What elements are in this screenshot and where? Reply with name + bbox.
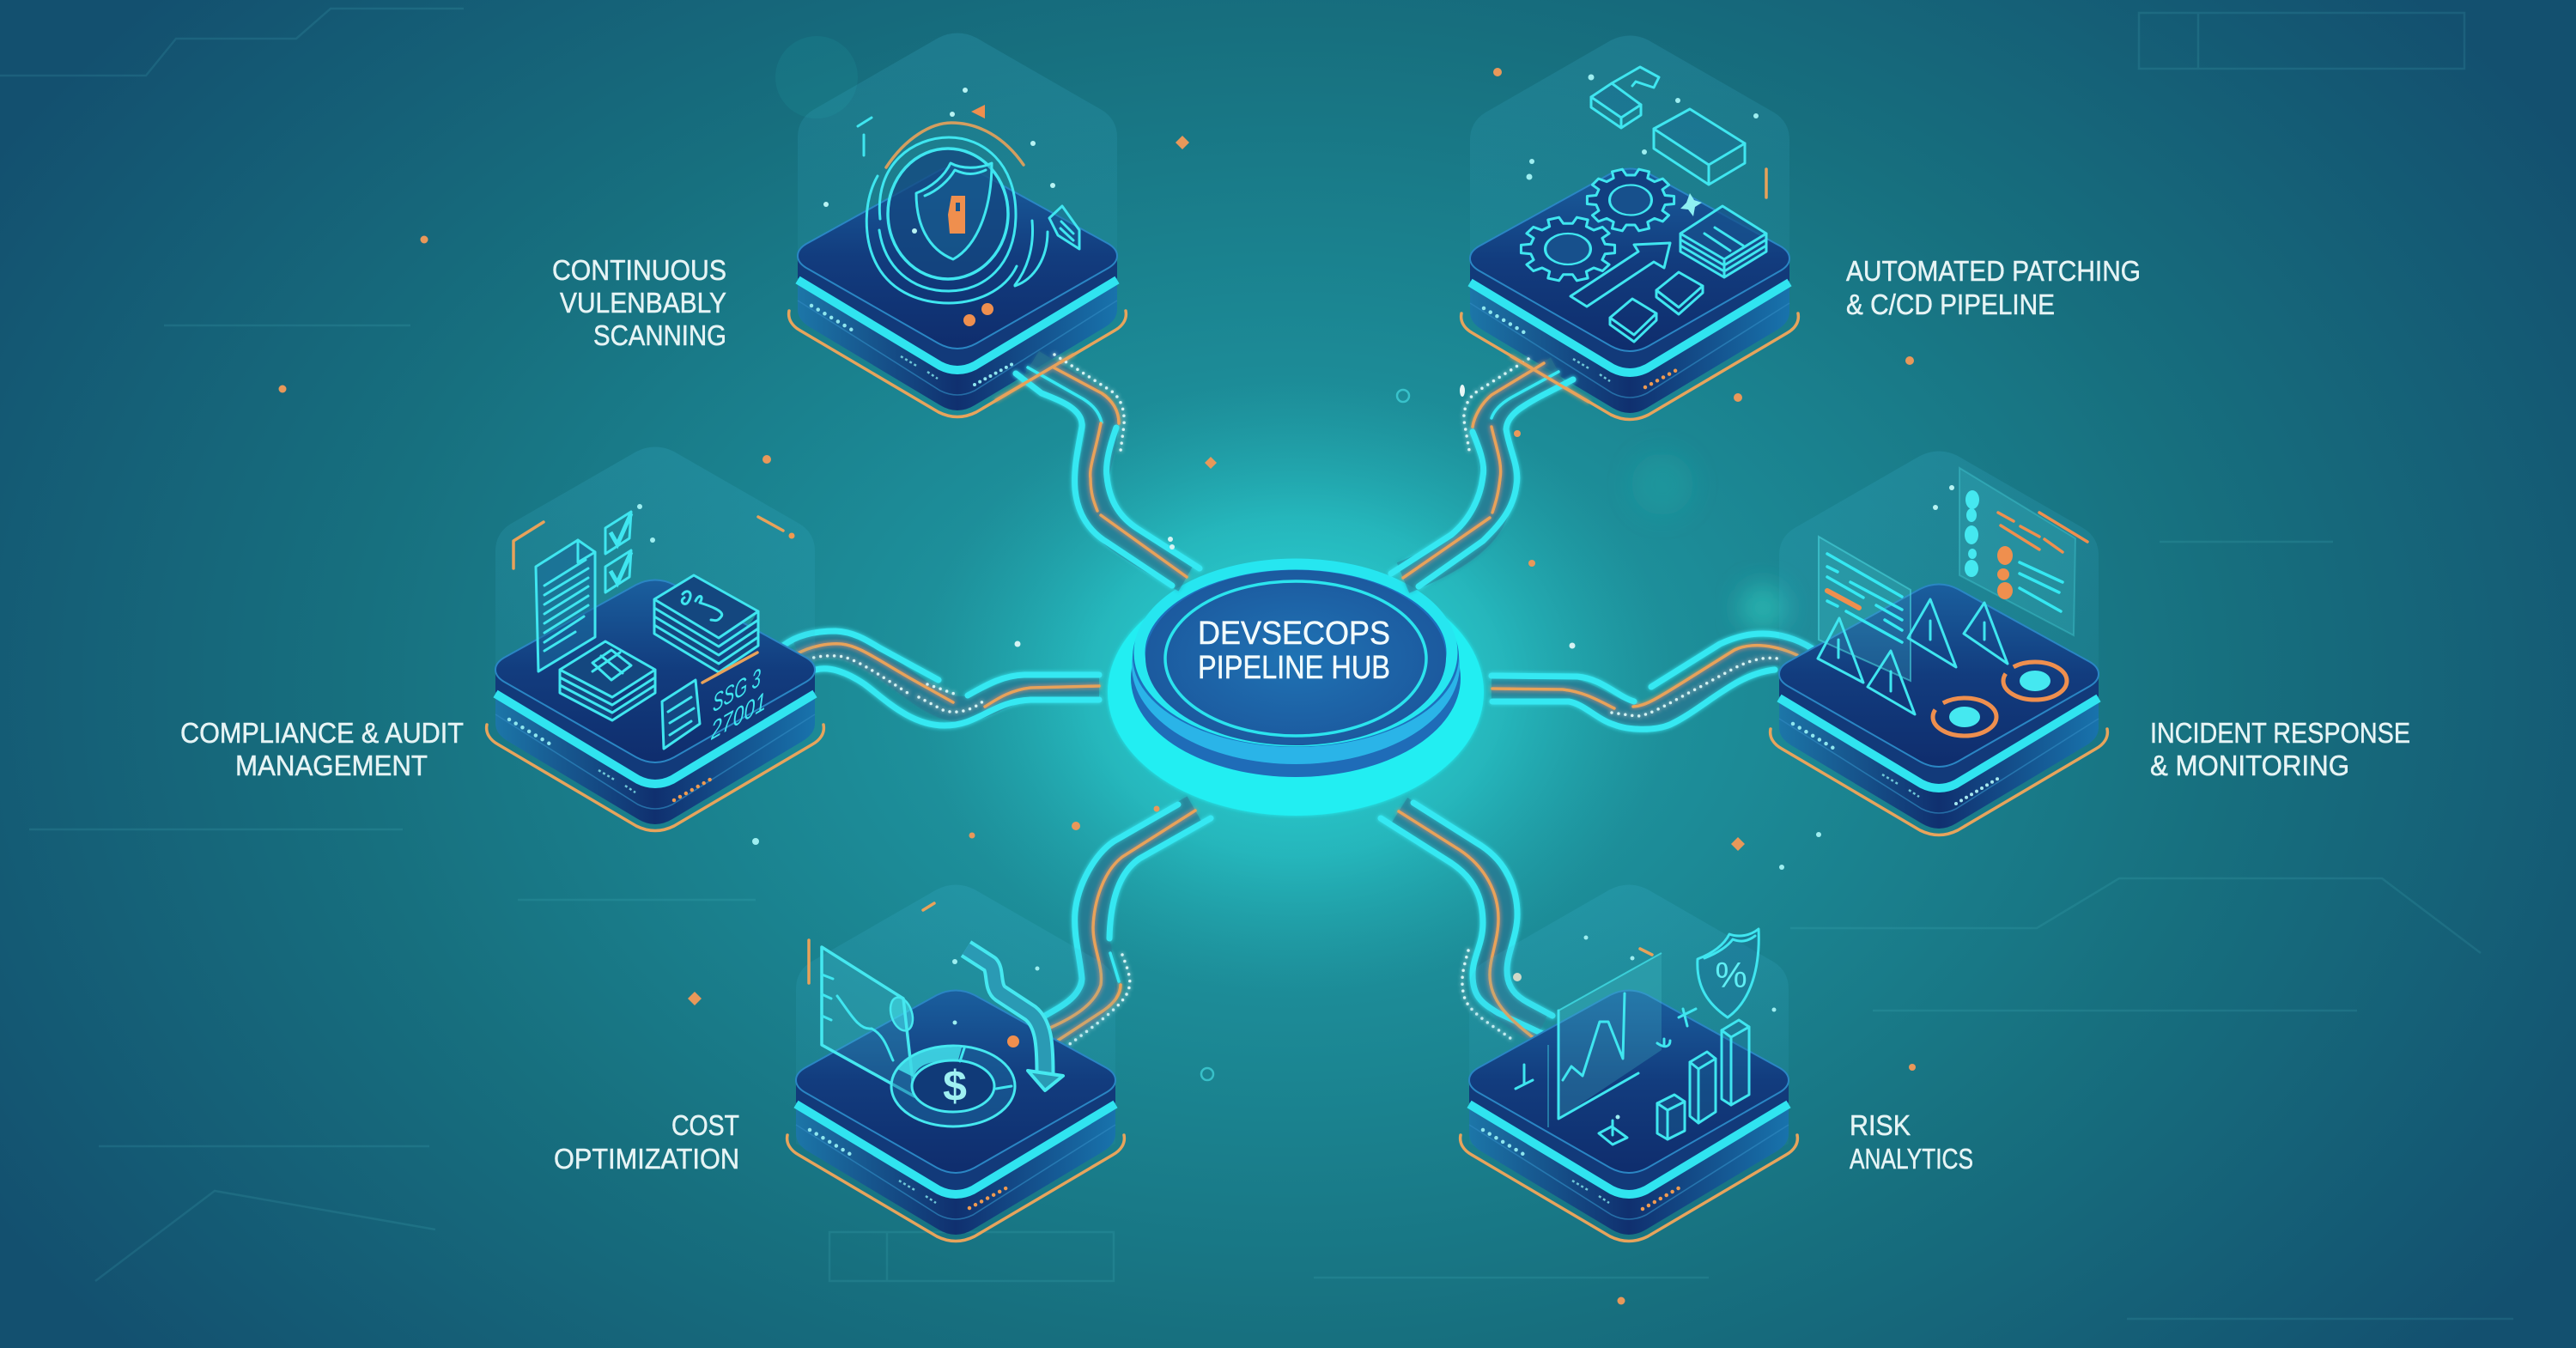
icon: percent shield — [1698, 929, 1759, 1017]
icon: cost chart — [822, 947, 917, 1096]
panel: compliance and audit — [487, 446, 823, 831]
hub disc — [1145, 570, 1446, 745]
connector: right — [1492, 634, 1812, 729]
icon: stack of certificates — [654, 575, 758, 672]
icon: log panel — [1819, 537, 1911, 681]
particles — [1513, 936, 1776, 1120]
label: incident response: & MONITORING — [2150, 750, 2349, 781]
particles — [1933, 485, 1954, 510]
small glyphs — [1516, 1009, 1696, 1145]
label: continuous vulnerability scanning: SCANNING — [593, 319, 726, 351]
icon: dollar donut — [891, 1046, 1015, 1126]
icon: downward arrow — [966, 949, 1063, 1090]
panel: automated patching — [1461, 36, 1798, 419]
panel: risk analytics — [1461, 884, 1797, 1242]
icon: gears — [1521, 169, 1674, 281]
label: incident response: INCIDENT RESPONSE — [2150, 717, 2410, 749]
standards text: SSG 3 — [713, 663, 761, 718]
icon: small certificate — [662, 680, 700, 749]
status dots — [1643, 1187, 1681, 1209]
status dots — [1645, 367, 1681, 387]
dollar sign: $ — [943, 1062, 967, 1110]
sparkle — [1680, 193, 1702, 216]
label: automated patching: AUTOMATED PATCHING — [1846, 255, 2141, 287]
hub base ring — [1108, 568, 1484, 816]
icon: chart panel — [1548, 953, 1662, 1127]
icon: warning triangles — [1818, 599, 2008, 714]
label: compliance and audit: COMPLIANCE & AUDIT — [180, 717, 464, 749]
floating cyan particles — [752, 385, 1821, 1080]
label: continuous vulnerability scanning: CONTINUOUS — [552, 254, 726, 286]
status dots — [674, 777, 714, 800]
label: continuous vulnerability scanning: VULENBABLY — [560, 287, 726, 319]
label: risk analytics: ANALYTICS — [1850, 1143, 1973, 1175]
label: risk analytics: RISK — [1850, 1109, 1911, 1141]
particles — [1527, 74, 1759, 180]
particles — [823, 88, 1055, 234]
connector: bottom-left — [1045, 805, 1211, 1046]
floating orange particles — [278, 68, 1916, 1305]
icon: boxes — [1591, 67, 1745, 185]
label: automated patching — [1846, 255, 2141, 320]
hub body — [1131, 580, 1461, 777]
central hub — [1108, 564, 1484, 816]
label: cost optimization: COST — [671, 1109, 739, 1141]
label: risk analytics — [1850, 1109, 1973, 1175]
panel: incident response — [1771, 452, 2107, 835]
standards number: 27001 — [710, 686, 766, 746]
platform — [787, 884, 1124, 1242]
label: automated patching: & C/CD PIPELINE — [1846, 288, 2055, 320]
platform — [1771, 452, 2107, 835]
icon: stack of reports — [560, 641, 655, 720]
particles — [952, 959, 1039, 1025]
orange marks — [513, 517, 795, 683]
platform — [789, 33, 1126, 417]
connector: bottom-right — [1381, 803, 1552, 1041]
orange marks — [963, 105, 993, 326]
label: cost optimization: OPTIMIZATION — [554, 1143, 739, 1175]
particles — [637, 504, 655, 543]
connector: left — [783, 631, 1099, 726]
panel: continuous vulnerability scanning — [789, 33, 1126, 417]
orange marks — [809, 903, 1019, 1047]
label: compliance and audit: MANAGEMENT — [235, 750, 428, 781]
connector: top-right — [1391, 356, 1589, 586]
icon: status rings — [1933, 662, 2067, 736]
percent symbol: % — [1715, 955, 1747, 995]
icon: checkboxes — [605, 512, 631, 592]
status dots — [1956, 778, 1999, 804]
hub title: DEVSECOPS — [1198, 616, 1390, 652]
icon: document — [536, 540, 595, 671]
hub glow — [918, 378, 1674, 996]
panel: cost optimization — [787, 884, 1124, 1242]
label: compliance and audit — [180, 717, 464, 781]
platform — [487, 446, 823, 831]
background glow blobs — [775, 36, 1787, 632]
icon: bars — [1657, 1020, 1749, 1139]
icon: chips — [1610, 272, 1703, 342]
orange marks — [1765, 169, 1768, 197]
label: continuous vulnerability scanning — [552, 254, 726, 351]
icon: upgrade arrow — [1571, 243, 1670, 307]
central hub: PIPELINE HUB — [1198, 650, 1390, 686]
connector: top-left — [996, 355, 1200, 586]
label: incident response — [2150, 717, 2410, 781]
label: cost optimization — [554, 1109, 739, 1175]
icon: shield scanner — [858, 118, 1079, 303]
platform — [1461, 36, 1798, 419]
orange marks — [1640, 949, 1652, 955]
status dots — [975, 364, 1012, 385]
icon: stacked patches — [1680, 206, 1766, 277]
status dots — [969, 1187, 1009, 1208]
icon: alerts panel — [1959, 468, 2087, 635]
platform — [1461, 884, 1797, 1242]
